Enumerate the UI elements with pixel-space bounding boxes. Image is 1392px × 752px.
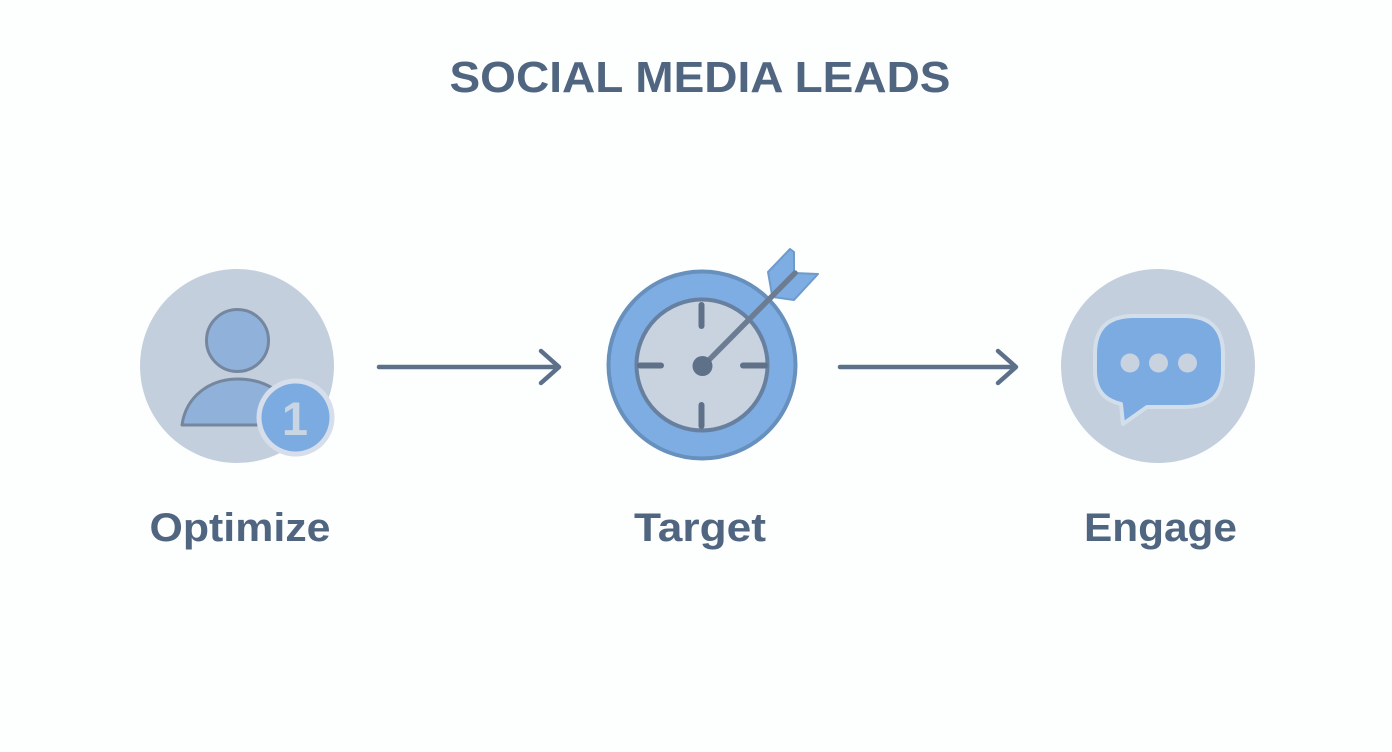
number badge: 1	[282, 392, 308, 445]
arrow fletching	[768, 249, 818, 300]
title: SOCIAL MEDIA LEADS	[450, 53, 950, 102]
icon: engage chat bubble	[1061, 269, 1255, 463]
user head	[206, 310, 268, 372]
icon: optimize profile	[140, 269, 334, 463]
speech bubble	[1095, 316, 1223, 424]
typing dots	[1120, 354, 1197, 372]
number badge	[256, 378, 334, 456]
label: target: Target	[634, 506, 766, 550]
arrow: target to engage	[840, 351, 1016, 383]
icon: target with arrow	[608, 249, 818, 458]
crosshair ticks	[640, 305, 765, 426]
arrow shaft	[703, 273, 795, 366]
label: engage: Engage	[1084, 506, 1237, 550]
user body	[182, 379, 285, 425]
label: optimize: Optimize	[150, 506, 330, 550]
arrow: optimize to target	[379, 351, 559, 383]
